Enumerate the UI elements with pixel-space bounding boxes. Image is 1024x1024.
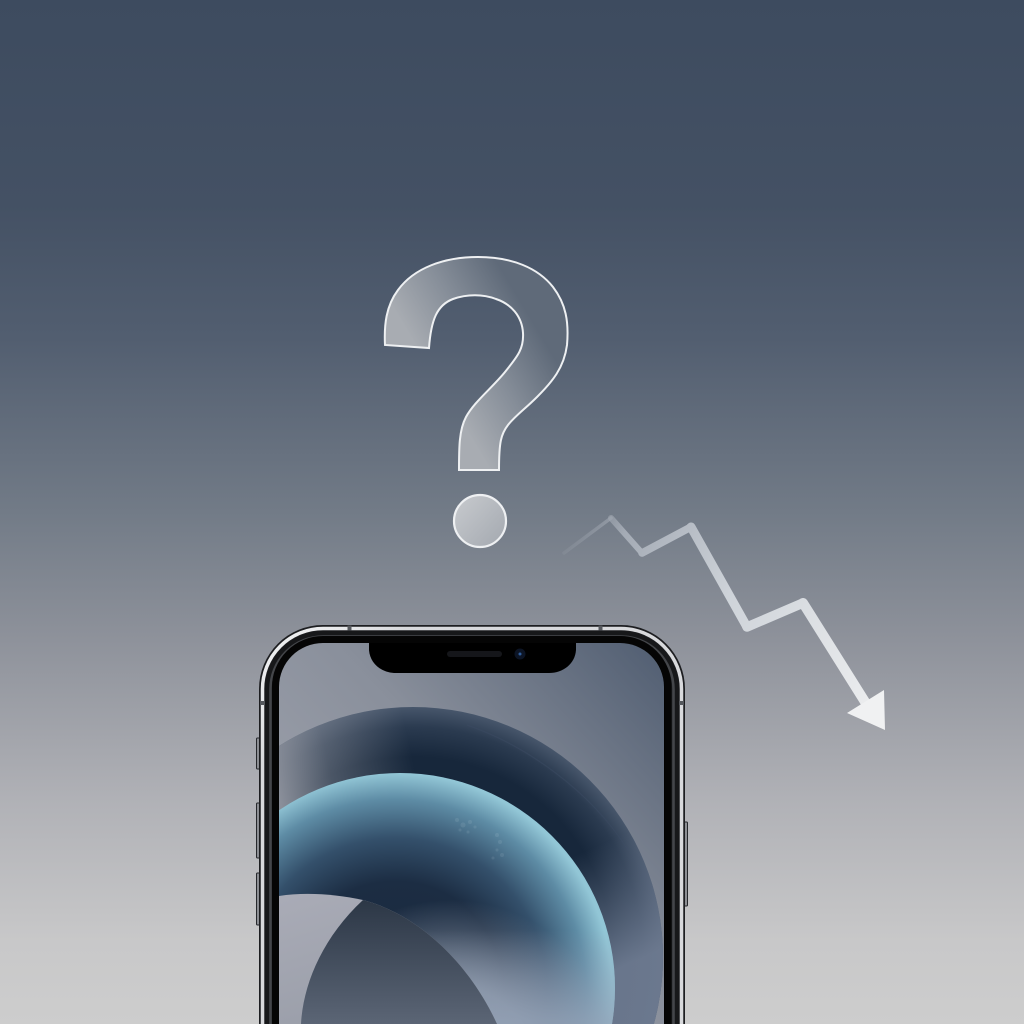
question mark dot (454, 495, 506, 547)
camera (514, 648, 526, 660)
phone frame (259, 625, 685, 1024)
icon: question mark (385, 257, 568, 547)
notch (369, 643, 576, 673)
wallpaper: blue ring (279, 773, 615, 1024)
wallpaper: speckle highlight (455, 818, 504, 860)
question mark hook (385, 257, 568, 470)
phone screen wallpaper (279, 643, 664, 1024)
phone (256, 625, 688, 1024)
wallpaper: grey hump (301, 900, 497, 1024)
speaker (447, 651, 502, 657)
wallpaper: dark disc (279, 707, 663, 1024)
wallpaper: inner light area (279, 894, 463, 1024)
arrow head (847, 690, 885, 730)
right side button (684, 822, 688, 906)
left side buttons (256, 738, 260, 925)
antenna bands (260, 626, 684, 705)
arrow: falling trend line (564, 518, 885, 730)
